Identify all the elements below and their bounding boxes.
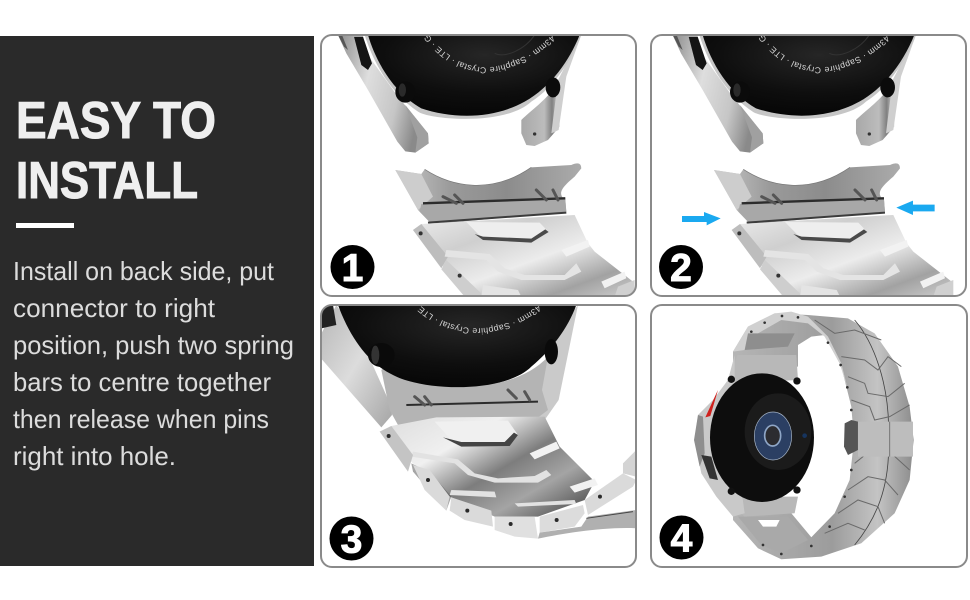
heading: easy to install: EASY TO (16, 92, 216, 150)
panel: step 3 (320, 304, 637, 568)
panel: step 2 (650, 34, 967, 297)
step 3 watch with band attached: 43mm · Sapphire Crystal · LTE · G (418, 306, 540, 334)
arrow: push left (896, 201, 935, 215)
step 1 watch and band (338, 36, 635, 295)
step 1 watch and band: 43mm · Sapphire Crystal · LTE · G (424, 36, 554, 74)
heading: easy to install (16, 92, 216, 210)
step 3 watch with band attached (322, 306, 635, 539)
heading: easy to install: INSTALL (16, 152, 198, 210)
instructions text: bars to centre together (13, 367, 271, 397)
instructions text: right into hole. (13, 441, 176, 471)
panel: step 4 (651, 305, 967, 567)
badge: number 3: 3 (341, 518, 362, 562)
badge: number 4 (660, 516, 704, 560)
badge: number 1: 1 (342, 247, 363, 290)
instructions text: position, push two spring (13, 330, 294, 360)
badge: number 3 (330, 516, 374, 562)
instructions text: Install on back side, put (13, 256, 275, 286)
badge: number 2 (659, 245, 703, 290)
badge: number 4: 4 (671, 518, 693, 560)
step 2 watch and band: 43mm · Sapphire Crystal · LTE · G (759, 36, 888, 74)
instructions text (13, 256, 294, 471)
badge: number 2: 2 (670, 247, 692, 290)
badge: number 1 (330, 245, 374, 290)
panel: step 1 (320, 34, 637, 297)
instructions text: then release when pins (13, 404, 269, 434)
step 4 assembled watch (694, 312, 914, 559)
step 2 watch and band (635, 36, 966, 318)
arrow: push right (682, 212, 721, 225)
panel: easy to install text (0, 36, 314, 566)
instructions text: connector to right (13, 293, 216, 323)
